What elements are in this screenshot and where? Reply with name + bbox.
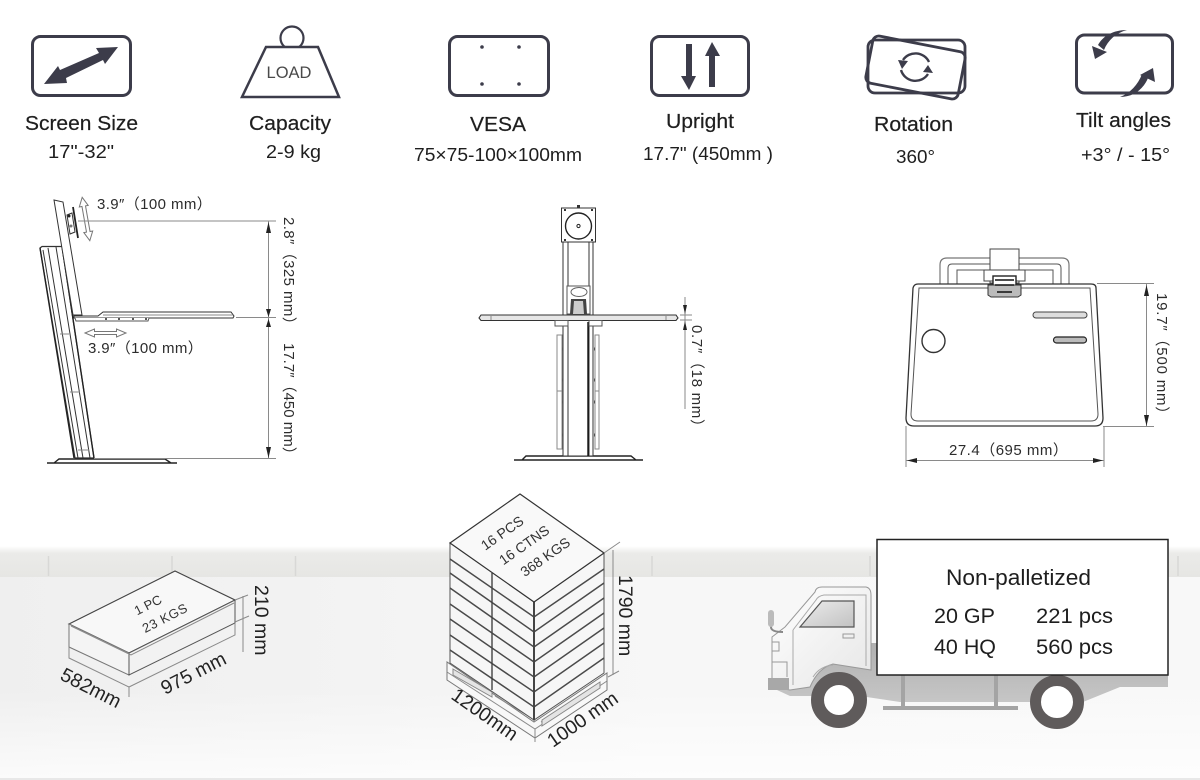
bumper xyxy=(768,678,789,690)
palletized stack: 368 KGS xyxy=(517,534,573,580)
cab xyxy=(768,587,871,690)
spec: rotation xyxy=(865,35,966,167)
side view drawing: 3.9″（100 mm） xyxy=(88,340,203,357)
spec: screen size: 17"-32" xyxy=(48,141,114,162)
rear wheel xyxy=(1036,680,1078,724)
dimension lines xyxy=(78,221,276,458)
VESA plate xyxy=(562,205,596,242)
base plate xyxy=(47,459,177,463)
single carton: 210 mm xyxy=(250,585,272,655)
side view drawing: 2.8″（325 mm） xyxy=(280,217,297,332)
carton stack sides xyxy=(450,543,604,720)
icon: diagonal double arrow xyxy=(32,36,130,96)
single carton xyxy=(57,571,272,713)
single carton: 582mm xyxy=(57,664,125,713)
spec: upright xyxy=(643,36,773,164)
palletized stack: 1790 mm xyxy=(614,575,636,656)
front wheel xyxy=(818,678,860,722)
dimension lines xyxy=(906,284,1154,467)
chassis xyxy=(777,643,1168,708)
cargo box with shipping quantities: Non-palletized xyxy=(946,565,1091,590)
top view drawing xyxy=(906,249,1170,467)
side view drawing xyxy=(40,196,297,463)
dimension lines xyxy=(604,542,620,677)
depth adjust arrow xyxy=(85,329,126,337)
base plate xyxy=(514,456,643,460)
truck xyxy=(768,540,1168,724)
cargo box with shipping quantities xyxy=(877,540,1168,675)
icon: up and down arrows xyxy=(652,36,748,96)
spec: VESA: VESA xyxy=(470,113,526,136)
lower column xyxy=(40,246,94,458)
spec: screen size xyxy=(25,36,138,162)
upper arm xyxy=(54,200,82,315)
cargo box with shipping quantities: 20 GP xyxy=(934,604,995,628)
spec: capacity: Capacity xyxy=(249,112,332,135)
thickness dimension xyxy=(680,297,692,409)
top view drawing: 19.7″（500 mm） xyxy=(1153,293,1170,422)
mirror xyxy=(771,620,783,632)
side view drawing: 3.9″（100 mm） xyxy=(97,196,212,213)
icon: VESA plate with holes xyxy=(450,36,548,96)
spec: tilt angles: +3° / - 15° xyxy=(1081,144,1170,165)
column xyxy=(557,242,599,456)
spec: VESA xyxy=(414,36,582,165)
cargo box with shipping quantities: 221 pcs xyxy=(1036,604,1113,628)
height adjust arrow xyxy=(78,197,94,241)
tablet slot xyxy=(1054,337,1086,343)
carton drawing xyxy=(69,571,249,697)
single carton: 1 PC xyxy=(132,592,164,618)
top view drawing: 27.4（695 mm） xyxy=(949,442,1068,459)
palletized stack: 16 PCS xyxy=(478,513,526,553)
icon: tilt arrows xyxy=(1076,30,1172,97)
cargo box with shipping quantities: 560 pcs xyxy=(1036,635,1113,659)
cable slot xyxy=(1033,312,1087,318)
front view drawing: 0.7″（18 mm） xyxy=(688,325,705,435)
palletized stack: 1000 mm xyxy=(543,687,622,752)
single carton: 23 KGS xyxy=(140,600,190,636)
spec: tilt angles xyxy=(1076,30,1172,165)
desk surface xyxy=(906,284,1103,426)
pallet xyxy=(447,662,607,742)
desk shelf xyxy=(479,315,678,326)
monitor mount xyxy=(67,207,78,238)
desk shelf xyxy=(74,312,234,321)
palletized stack: 16 CTNS xyxy=(496,522,552,568)
spec: capacity xyxy=(242,26,339,162)
icon: rotated screens xyxy=(865,35,966,100)
side view drawing: 17.7″（450 mm） xyxy=(280,343,297,462)
spec: tilt angles: Tilt angles xyxy=(1076,109,1171,132)
cargo box with shipping quantities: 40 HQ xyxy=(934,635,996,659)
background: wall and floor xyxy=(0,546,1200,780)
handle frame xyxy=(940,258,1069,284)
stack top xyxy=(450,494,604,602)
spec: capacity: 2-9 kg xyxy=(266,141,321,162)
palletized stack: 1200mm xyxy=(447,684,522,746)
spec: screen size: Screen Size xyxy=(25,112,138,135)
cab window xyxy=(800,601,854,627)
spec: upright: Upright xyxy=(666,110,734,133)
central mount xyxy=(984,249,1025,297)
spec: upright: 17.7" (450mm ) xyxy=(643,143,773,164)
single carton: 975 mm xyxy=(157,648,230,699)
icon: load weight: LOAD xyxy=(267,64,312,82)
spec: rotation: Rotation xyxy=(874,113,953,136)
spec: VESA: 75×75-100×100mm xyxy=(414,144,582,165)
cup hole xyxy=(922,330,945,352)
spec: rotation: 360° xyxy=(896,146,935,167)
front view drawing xyxy=(479,205,705,460)
palletized stack xyxy=(447,494,636,752)
